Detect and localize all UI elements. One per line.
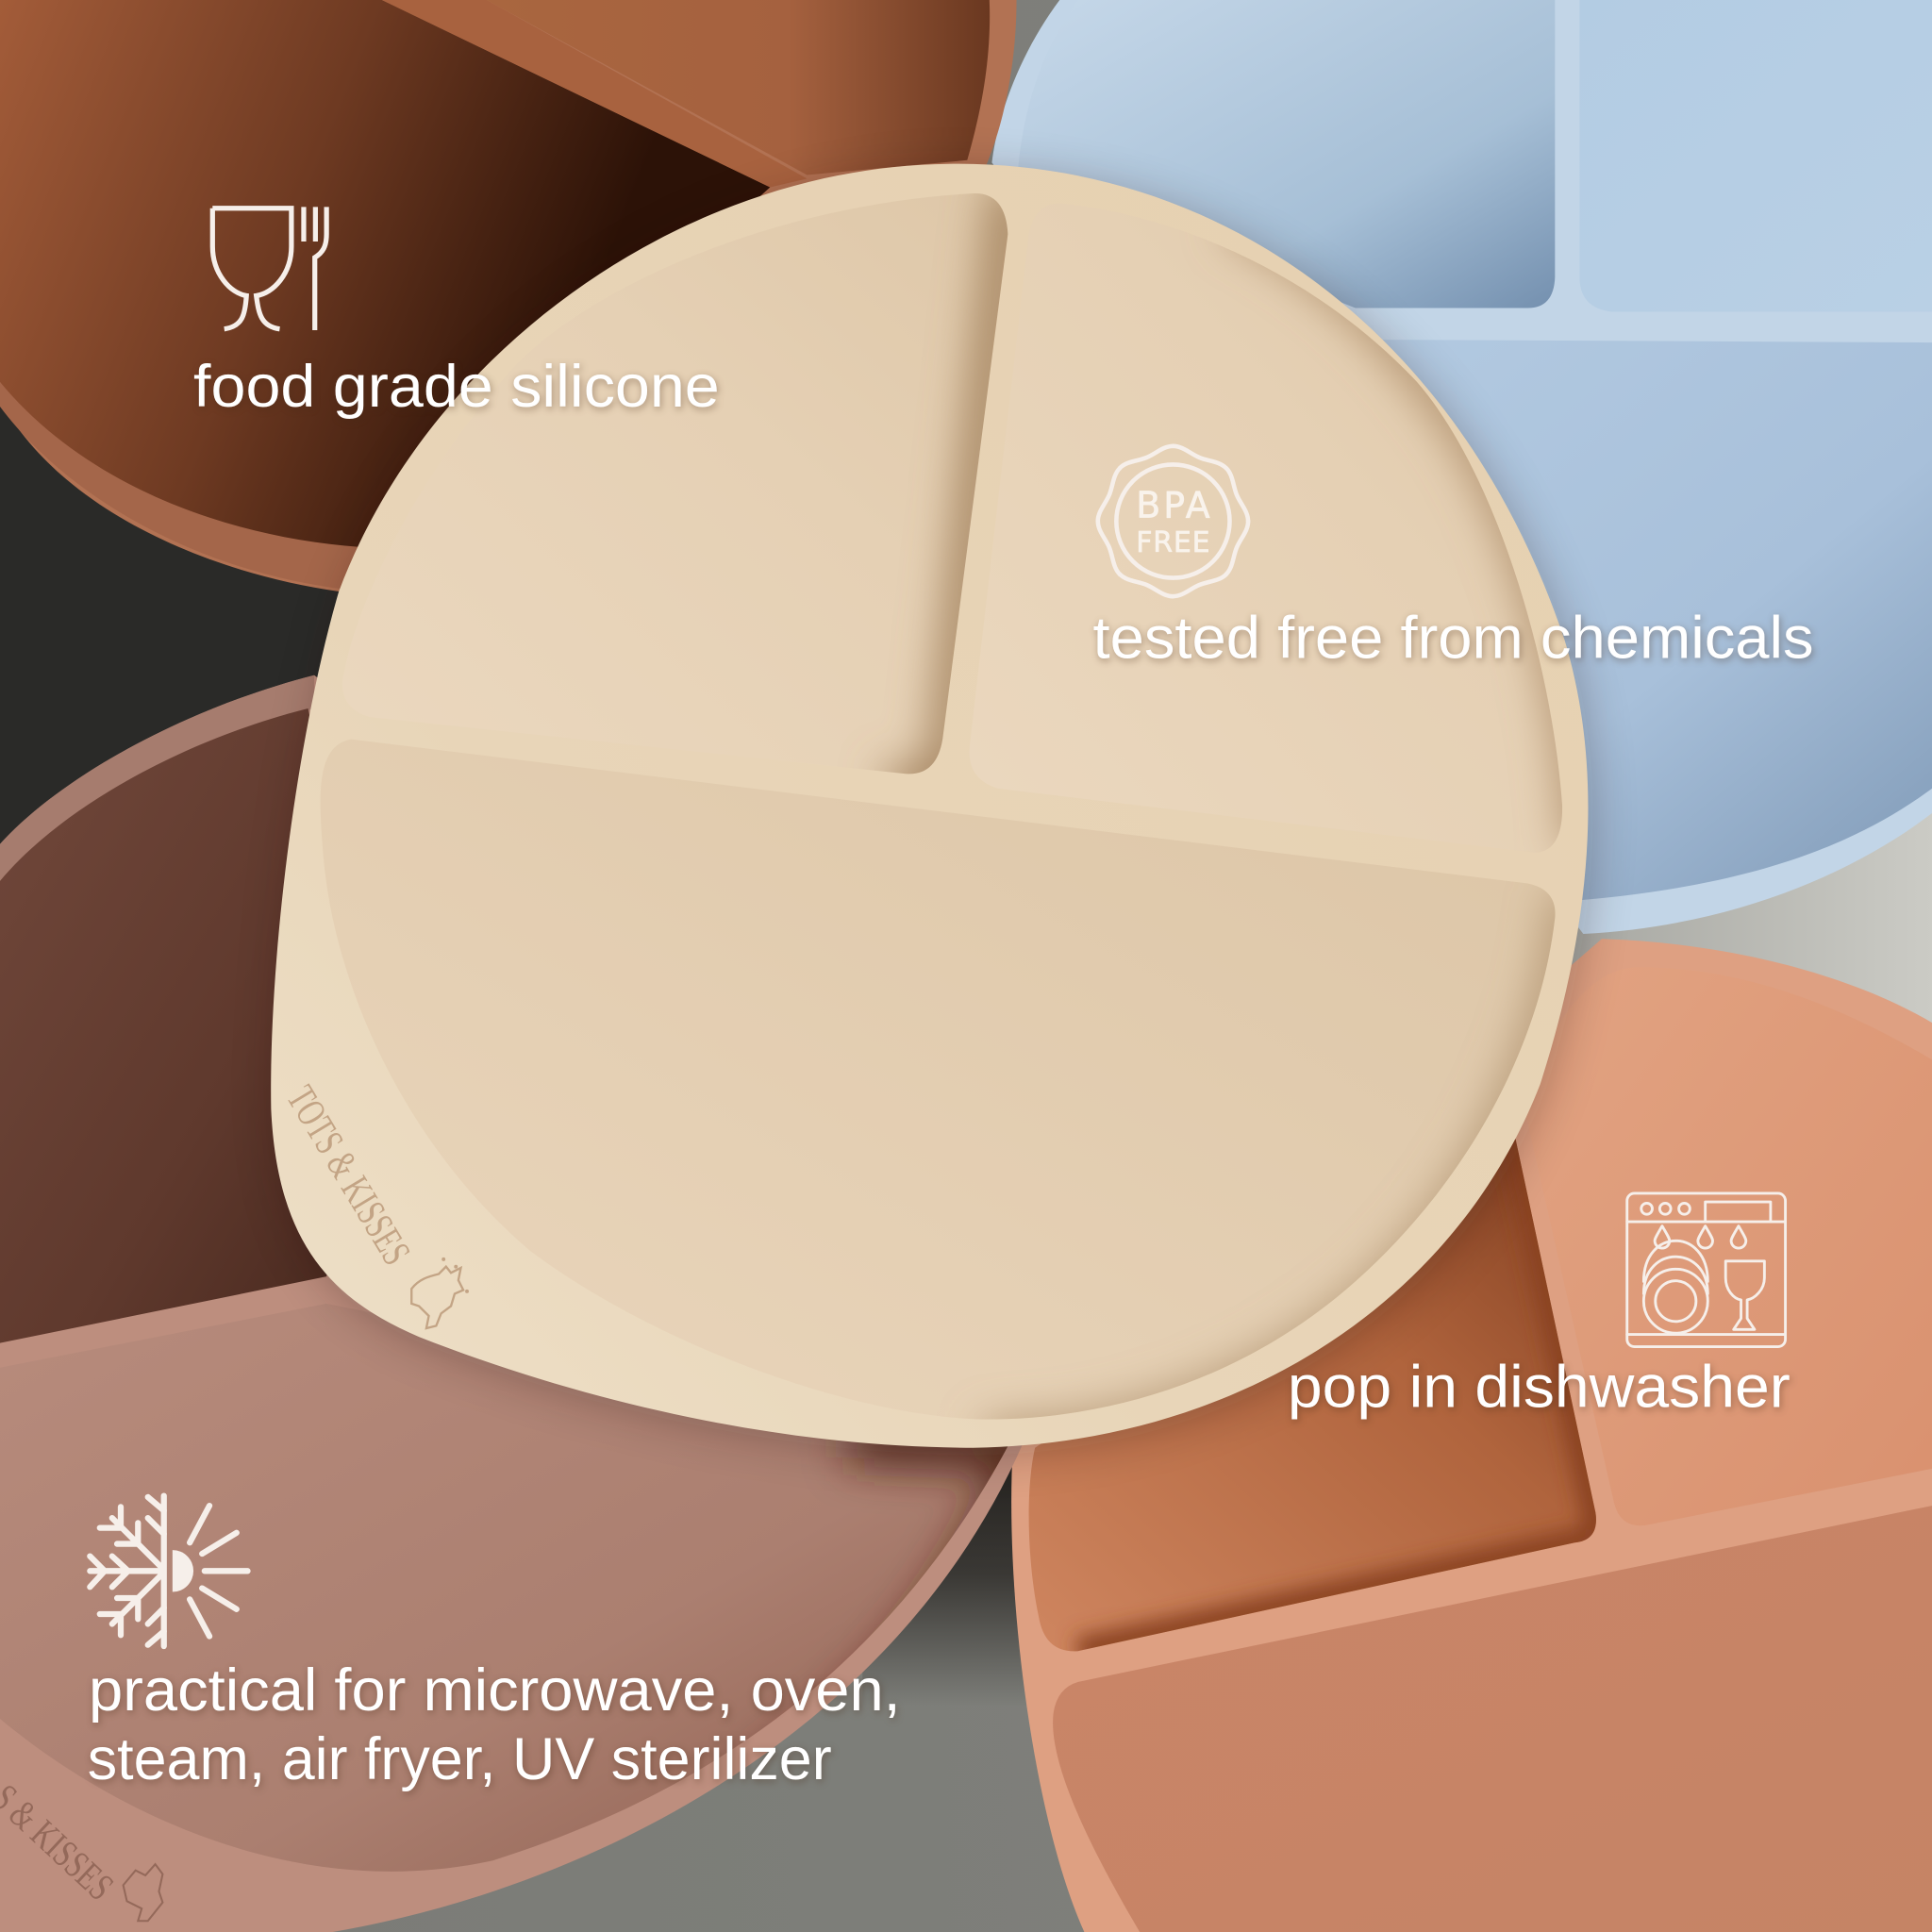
brown right compartment — [487, 0, 990, 175]
caption: practical for microwave, oven, — [89, 1657, 901, 1724]
blue compartment lower — [1232, 339, 1932, 906]
icon: BPA free seal: BPA — [1136, 485, 1210, 526]
plate shadow — [275, 171, 1593, 1456]
blue compartment top left — [1018, 0, 1555, 308]
icon: BPA free seal: FREE — [1136, 526, 1210, 559]
brown lower rim — [0, 382, 382, 589]
caption: tested free from chemicals — [1093, 605, 1814, 671]
icon: BPA free seal — [1082, 430, 1264, 612]
feature: food grade silicone — [193, 207, 720, 420]
brown divider — [382, 0, 808, 188]
pink upper compartment — [0, 708, 370, 1343]
icon: snowflake and sun — [90, 1496, 248, 1646]
feature: dishwasher — [1288, 1193, 1790, 1421]
pink lower compartment — [0, 1304, 1010, 1872]
feature: BPA free — [1082, 430, 1814, 671]
panel: beige plate — [271, 164, 1593, 1456]
compartment top right — [1209, 242, 1562, 849]
pink upper rim shade — [0, 675, 314, 887]
shadow between lower plates — [862, 1441, 1072, 1707]
panel: brown plate — [0, 0, 1017, 591]
panel: orange plate — [1011, 939, 1932, 1932]
orange compartment upper left — [1029, 1127, 1596, 1651]
embossed brand logo: TOTS & KISSES — [277, 1078, 419, 1273]
brown main compartment — [0, 0, 770, 569]
compartment top left — [836, 193, 1008, 774]
icon: dishwasher — [1627, 1193, 1786, 1347]
caption — [88, 1657, 901, 1792]
orange compartment bottom — [1053, 1506, 1932, 1932]
dark gap left between plates — [0, 370, 394, 887]
panel: pink plate — [0, 675, 1029, 1932]
blue compartment top right — [1579, 0, 1932, 311]
orange compartment upper right — [1522, 967, 1932, 1525]
caption: food grade silicone — [193, 354, 720, 420]
icon: wine glass and fork — [212, 207, 326, 330]
small unicorn mark on pink plate — [124, 1864, 162, 1921]
caption: steam, air fryer, UV sterilizer — [88, 1726, 832, 1792]
panel: blue plate — [991, 0, 1932, 934]
feature: heat and cold safe — [88, 1496, 901, 1792]
compartment bottom — [321, 740, 1571, 1440]
caption: pop in dishwasher — [1288, 1355, 1790, 1421]
plate body — [271, 164, 1588, 1448]
